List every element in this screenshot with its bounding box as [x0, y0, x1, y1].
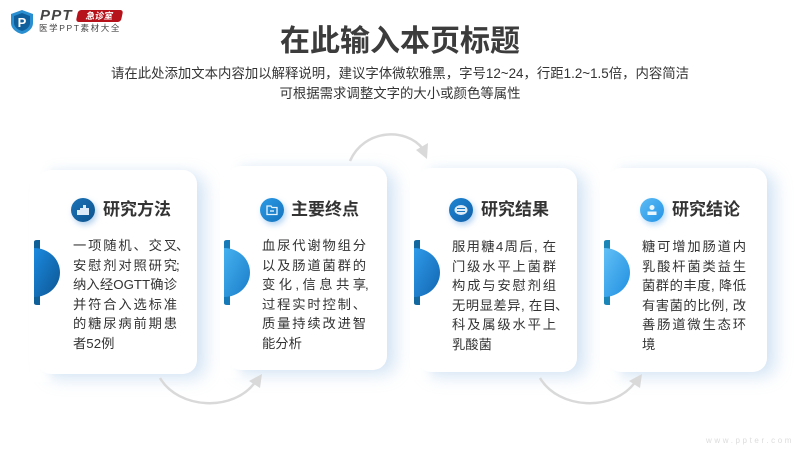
text: 菌群的丰度, 降低: [642, 278, 746, 293]
text: 乳酸杆菌类益生: [642, 258, 746, 274]
panel: 研究方法: [37, 170, 197, 374]
panel: 主要终点: ,: [365, 277, 369, 292]
text: [262, 238, 369, 350]
logo badge: [76, 10, 123, 22]
logo: [11, 7, 123, 34]
panel: 研究结果: [417, 168, 577, 372]
heading: 研究结果: [481, 200, 549, 219]
text: 门级水平上菌群: [452, 258, 556, 274]
logo badge: 急诊室: [85, 11, 114, 21]
subtitle: 请在此处添加文本内容加以解释说明，建议字体微软雅黑，字号12~24，行距1.2~1.5倍，内容简洁: [111, 66, 689, 81]
panel: 研究方法: ;: [176, 258, 180, 272]
subtitle: [111, 66, 689, 101]
panel: 研究方法: 、: [176, 238, 189, 253]
text: 能分析: [262, 336, 302, 350]
text: 纳入经OGTT确诊: [73, 277, 177, 292]
text: 服用糖4周后, 在: [452, 239, 556, 254]
text: 以及肠道菌群的: [262, 258, 366, 272]
text: 有害菌的比例, 改: [642, 298, 746, 312]
text: 并符合入选标准: [73, 296, 177, 312]
text: 科及属级水平上: [452, 317, 556, 332]
icon: chart building: [71, 198, 95, 222]
text: 过程实时控制、: [262, 296, 366, 312]
title: 在此输入本页标题: [280, 25, 520, 58]
marker: [414, 240, 440, 305]
icon: shield: [11, 10, 33, 34]
marker: [604, 240, 630, 305]
text: 糖可增加肠道内: [642, 239, 746, 254]
arrow: curved top 2 to 3: [349, 133, 428, 162]
text: 安慰剂对照研究: [73, 258, 177, 272]
arrow: curved bottom 3 to 4: [539, 374, 642, 404]
icon: shield: P: [18, 15, 27, 30]
text: 的糖尿病前期患: [73, 316, 177, 331]
text: 构成与安慰剂组: [452, 278, 556, 293]
text: 血尿代谢物组分: [262, 238, 366, 253]
marker: [34, 240, 60, 305]
logo wordmark: PPT: [40, 7, 73, 24]
watermark: www.ppter.com: [706, 436, 794, 445]
text: 变化,信息共享: [262, 277, 366, 292]
heading: 主要终点: [291, 200, 359, 219]
text: [452, 239, 568, 352]
text: 质量持续改进智: [262, 316, 366, 331]
panel: 研究结果: 、: [555, 298, 568, 312]
text: 善肠道微生态环: [642, 317, 746, 332]
heading: 研究方法: [103, 200, 171, 219]
text: 无明显差异, 在目: [452, 298, 556, 312]
marker: [224, 240, 250, 305]
text: 一项随机、交叉: [73, 238, 177, 253]
subtitle: 可根据需求调整文字的大小或颜色等属性: [279, 86, 521, 101]
text: [642, 239, 746, 352]
icon: folder: [260, 198, 284, 222]
icon: person: [640, 198, 664, 222]
text: 者52例: [73, 336, 114, 350]
text: [73, 238, 189, 350]
panel: 研究结论: [607, 168, 767, 372]
text: 境: [642, 336, 655, 352]
icon: chat: [449, 198, 473, 222]
heading: 研究结论: [672, 200, 740, 219]
text: 乳酸菌: [452, 336, 492, 352]
arrow: curved bottom 1 to 2: [159, 374, 262, 404]
logo tagline: 医学PPT素材大全: [39, 23, 121, 33]
panel: 主要终点: [227, 166, 387, 370]
